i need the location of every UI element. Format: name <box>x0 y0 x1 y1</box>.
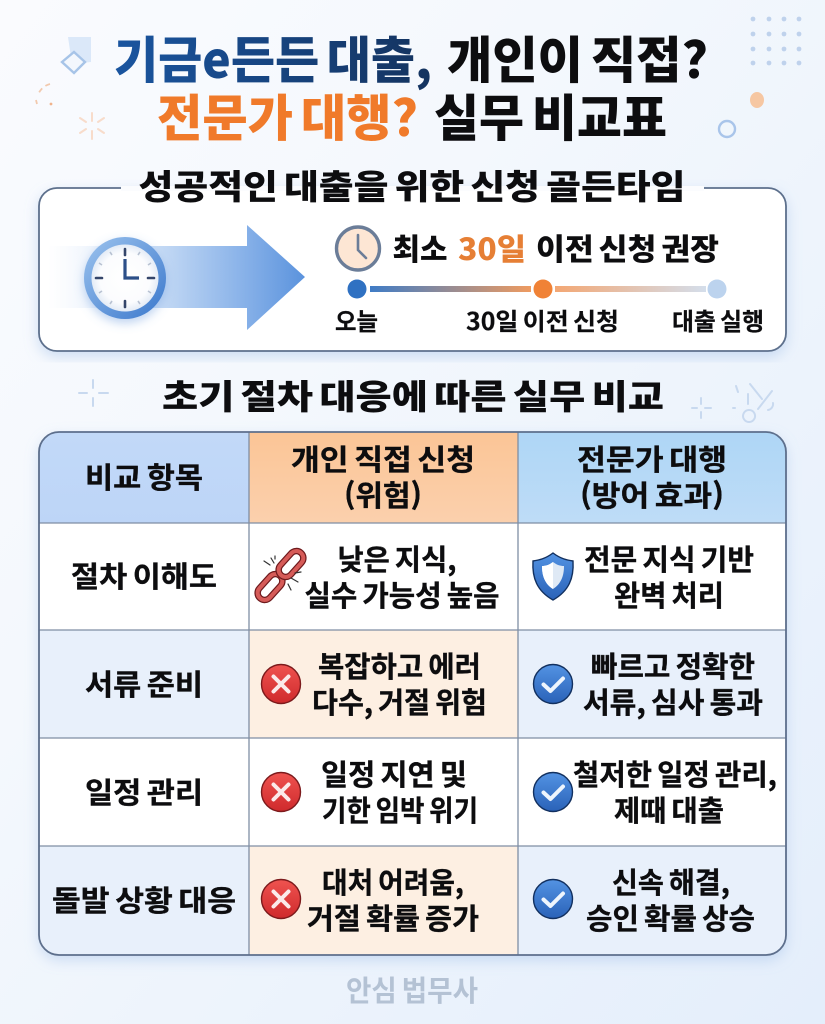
row: 일정 관리: 철저한 일정 관리, <box>573 752 777 794</box>
decorative icons: top right <box>719 17 801 137</box>
row: 서류 준비: 다수, 거절 위험 <box>312 680 487 722</box>
timeline: 대출 실행 <box>672 302 764 337</box>
comparison table <box>39 432 786 955</box>
row: 절차 이해도: 절차 이해도 <box>71 554 217 596</box>
header row: 개인 직접 신청 <box>291 437 475 479</box>
recommendation text: 최소 <box>392 225 448 269</box>
decorative sparkles <box>79 380 773 422</box>
row: 일정 관리: 일정 관리 <box>85 770 203 812</box>
header row: 비교 항목 <box>85 455 203 497</box>
title: 전문가 대행? <box>157 79 418 151</box>
row: 서류 준비: 복잡하고 에러 <box>318 644 481 686</box>
recommendation text: 30일 <box>458 225 526 269</box>
panel: golden time <box>39 160 786 351</box>
row: 돌발 상황 대응: 대처 어려움, <box>322 860 464 902</box>
row: 일정 관리 <box>85 752 777 830</box>
row: 절차 이해도: 실수 가능성 높음 <box>304 573 500 615</box>
icon: check mark <box>534 880 572 918</box>
icon: small clock <box>336 227 380 270</box>
row: 서류 준비: 서류 준비 <box>85 662 203 704</box>
row: 서류 준비 <box>85 644 763 722</box>
icon: broken chain <box>255 548 306 603</box>
row: 절차 이해도: 낮은 지식, <box>338 537 456 579</box>
row: 돌발 상황 대응: 승인 확률 상승 <box>586 896 755 938</box>
icon: large clock <box>84 237 166 319</box>
timeline: 오늘 <box>335 302 378 337</box>
row: 돌발 상황 대응: 거절 확률 증가 <box>307 896 479 938</box>
icon: check mark <box>534 772 572 812</box>
title: 기금e든든 대출, <box>114 21 432 93</box>
row: 서류 준비: 서류, 심사 통과 <box>583 680 763 722</box>
header row: (위험) <box>344 473 422 515</box>
row: 절차 이해도: 완벽 처리 <box>614 573 724 615</box>
header row: (방어 효과) <box>580 473 724 515</box>
row: 돌발 상황 대응: 신속 해결, <box>612 860 730 902</box>
header row: 전문가 대행 <box>577 437 727 479</box>
footer brand: 안심 법무사 <box>346 968 478 1010</box>
icon: x mark <box>262 664 300 704</box>
title <box>114 21 708 151</box>
row: 절차 이해도 <box>71 537 754 615</box>
heading: golden time: 성공적인 대출을 위한 신청 골든타임 <box>138 160 686 209</box>
row: 서류 준비: 빠르고 정확한 <box>591 644 755 686</box>
icon: x mark <box>262 880 300 918</box>
arrow <box>48 225 305 330</box>
row: 일정 관리: 일정 지연 및 <box>321 752 467 794</box>
recommendation text: 이전 신청 권장 <box>536 225 719 269</box>
decorative icons: top left <box>36 37 104 139</box>
timeline: 30일 이전 신청 <box>466 302 619 337</box>
recommendation text <box>392 225 719 269</box>
icon: x mark <box>262 772 300 812</box>
row: 절차 이해도: 전문 지식 기반 <box>584 537 754 579</box>
title: 개인이 직접? <box>447 21 708 93</box>
row: 돌발 상황 대응: 돌발 상황 대응 <box>52 878 236 920</box>
heading: practical comparison: 초기 절차 대응에 따른 실무 비교 <box>162 370 664 419</box>
icon: check mark <box>534 664 572 704</box>
row: 일정 관리: 기한 임박 위기 <box>322 788 478 830</box>
icon: shield <box>533 553 573 600</box>
row: 일정 관리: 제때 대출 <box>614 788 724 830</box>
header row <box>85 437 727 515</box>
row: 돌발 상황 대응 <box>52 860 755 938</box>
title: 실무 비교표 <box>434 79 667 151</box>
timeline <box>335 280 764 337</box>
